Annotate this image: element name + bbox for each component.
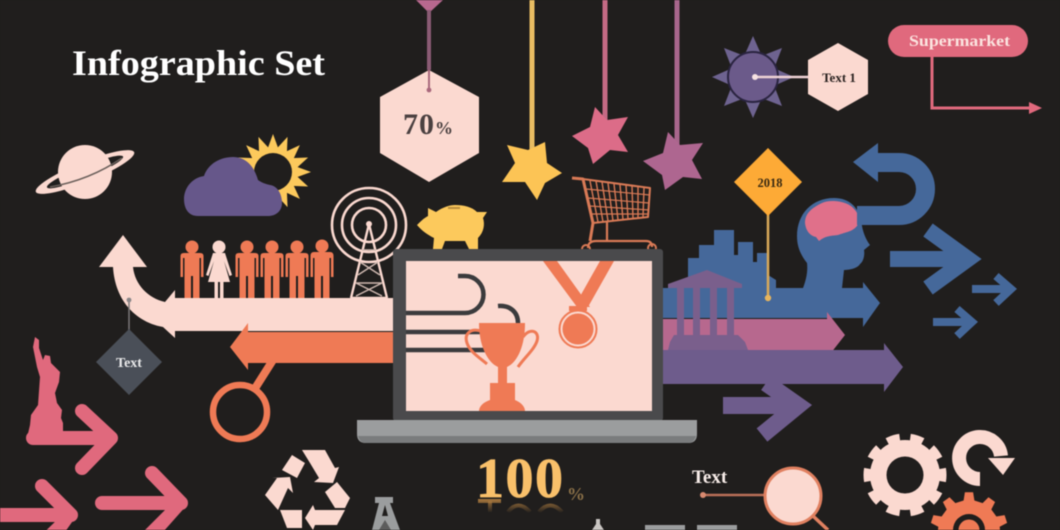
hexagon: 70% — [380, 70, 479, 182]
people row — [180, 240, 334, 298]
person icon 1 — [180, 240, 204, 298]
person icon 2 — [206, 240, 232, 298]
bottom edge fragments — [592, 519, 737, 530]
pole sign: 2018: 2018 — [758, 176, 782, 190]
person icon 6 — [310, 240, 334, 298]
icon: head with brain — [797, 198, 870, 288]
blue chevron arrow large — [890, 230, 968, 288]
trophy — [466, 323, 538, 411]
title: Infographic Set — [72, 43, 325, 83]
diamond label: Text: Text — [116, 356, 142, 371]
big number: 100%: 100 — [476, 448, 564, 510]
diamond pin to 70% hexagon — [416, 0, 443, 70]
laptop — [357, 249, 697, 443]
hexagon: Text 1: Text 1 — [822, 70, 856, 85]
icon: oil derrick — [372, 497, 400, 530]
hanging yellow star — [502, 0, 562, 200]
label: Text with magnifier — [692, 467, 828, 530]
icon: white gear — [867, 437, 943, 513]
hanging pink star — [572, 0, 628, 164]
icon: temple — [668, 270, 748, 350]
purple chevron arrow — [723, 383, 798, 435]
blue chevron arrow small lower — [933, 309, 972, 336]
blue chevron arrow small right — [972, 276, 1011, 303]
icon: ringed planet — [32, 143, 138, 201]
person icon 4 — [260, 240, 284, 298]
person icon 3 — [236, 240, 258, 298]
orange arrow with ring — [213, 323, 393, 439]
big number: 100%: % — [567, 484, 585, 504]
icon: sun behind cloud — [184, 134, 311, 216]
purple arrow — [663, 343, 903, 392]
wind lines — [406, 276, 518, 350]
pink arrow — [663, 312, 845, 358]
supermarket pill with arrow: Supermarket — [909, 33, 1011, 50]
icon: radio tower — [332, 188, 406, 298]
person icon 5 — [286, 240, 308, 298]
icon: statue of liberty — [27, 337, 63, 438]
icon: circular arrow — [959, 437, 1015, 479]
pink chevron arrow 1 — [33, 411, 111, 468]
icon: orange gear — [931, 492, 1007, 530]
hanging mauve star — [643, 0, 703, 190]
medal — [543, 261, 614, 348]
big pink curved arrow — [99, 235, 393, 338]
icon: piggy bank — [417, 205, 487, 249]
blue arrow — [663, 282, 880, 327]
icon: shopping cart — [572, 178, 656, 253]
icon: recycle — [265, 450, 350, 530]
diamond label: Text — [96, 298, 162, 395]
hexagon: Text 1 — [808, 43, 868, 111]
blue U-turn arrow — [853, 143, 925, 216]
pink chevron arrow 2 — [0, 486, 77, 530]
hexagon: 70%: 70% — [403, 108, 454, 141]
supermarket pill with arrow — [888, 25, 1042, 114]
purple sun with connector — [712, 36, 812, 118]
pink chevron arrow 3 — [102, 473, 187, 530]
pole sign: 2018 — [734, 148, 802, 301]
label: Text with magnifier: Text — [692, 467, 728, 488]
blue skyline — [663, 230, 776, 290]
